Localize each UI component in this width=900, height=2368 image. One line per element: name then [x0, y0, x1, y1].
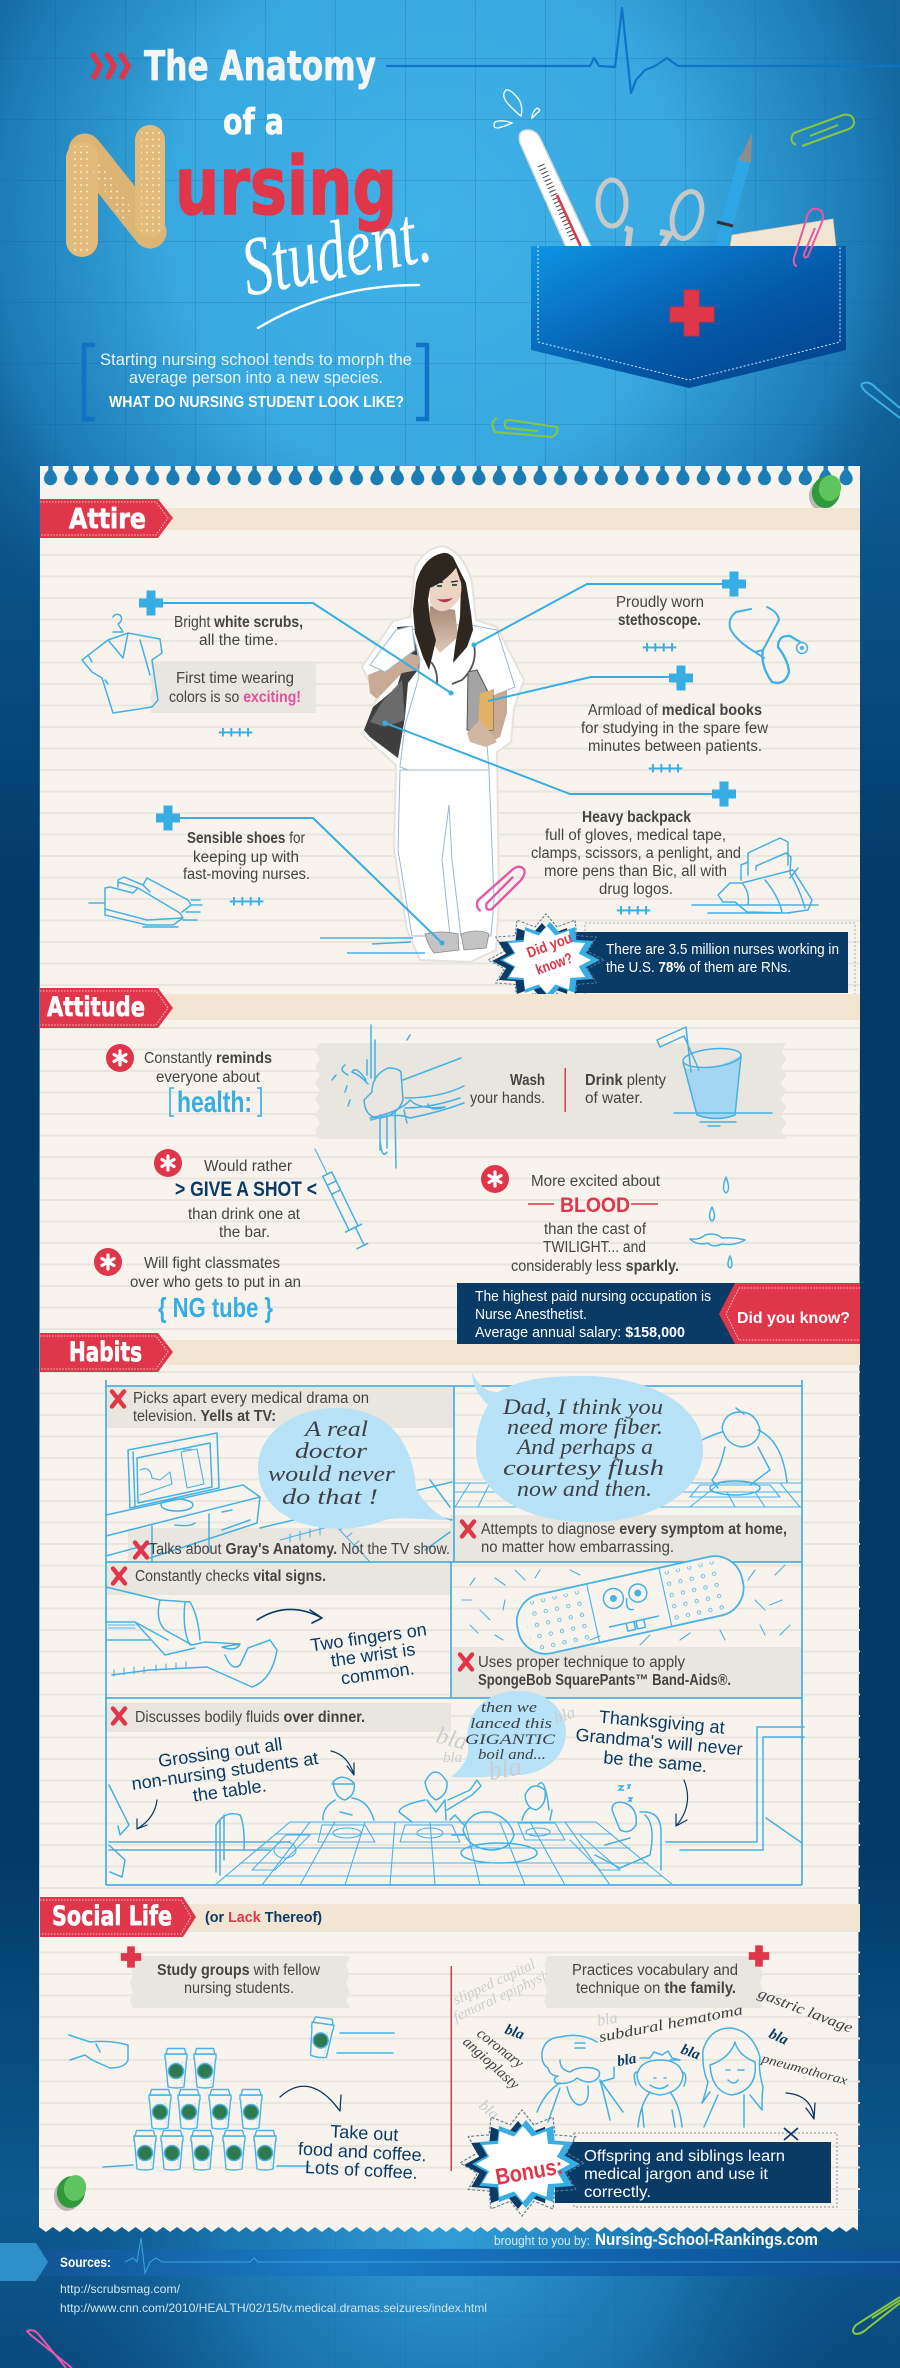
bla words: bla: [503, 2022, 527, 2043]
social: study groups: [121, 1946, 350, 2008]
caption: take out: Take out: [330, 2121, 399, 2145]
icon: television: [128, 1433, 219, 1508]
attitude: health reminder: [106, 1044, 272, 1119]
nurse figure: [320, 546, 524, 962]
arrow: scrubs: [162, 603, 451, 693]
attitude: give a shot: than drink one at: [188, 1206, 301, 1223]
speech bubble: dad: Dad, I think you: [502, 1394, 663, 1419]
callout: white scrubs: ++++: [218, 723, 254, 742]
word BLOOD: BLOOD: [560, 1194, 630, 1217]
title line: of a: of a: [223, 102, 284, 143]
shoes: [425, 931, 489, 953]
caption: dinner: Discusses bodily fluids over dinner.: [135, 1709, 365, 1726]
callout: white scrubs: all the time.: [199, 632, 278, 649]
icon: coffee cup held: [307, 2017, 335, 2059]
callout: medical books: Armload of medical books: [588, 702, 762, 719]
arrow: family: [786, 2093, 815, 2119]
source links: http://www.cnn.com/2010/HEALTH/02/15/tv.medical.dramas.seizures/index.html: [60, 2301, 487, 2315]
fact text: Offspring and siblings learn: [584, 2148, 785, 2165]
panel: TV sketch: [106, 1433, 452, 1562]
icon: green paperclip top right: [791, 115, 854, 146]
red plus: [749, 1945, 769, 1967]
caption: two fingers: Two fingers on: [309, 1619, 428, 1655]
term: coronary angioplasty: angioplasty: [459, 2034, 522, 2093]
speech bubble: real doctor: doctor: [295, 1438, 368, 1463]
icon: scrub shirt: [82, 614, 162, 713]
callout: bonus: [460, 2110, 837, 2216]
callout: stethoscope: stethoscope.: [618, 612, 701, 629]
speech bubble: gigantic boil: [433, 1691, 578, 1786]
social: family vocabulary: technique on the family.: [576, 1980, 736, 1997]
speech bubble: gigantic boil: then we: [481, 1700, 537, 1716]
callout: stethoscope: [616, 594, 808, 683]
section: Habits: Habits: [69, 1337, 142, 1368]
caption: two fingers: common.: [340, 1658, 416, 1688]
grey bla words: bla: [443, 1750, 462, 1766]
stethoscope: [431, 645, 475, 685]
social: family vocabulary: [451, 1945, 769, 2026]
icon: droplets: [690, 1177, 745, 1268]
icon: pen: [715, 133, 752, 247]
section: Attitude: [40, 988, 860, 1028]
callout: medical books: [581, 702, 769, 778]
caption: diagnose: [462, 1521, 787, 1556]
turkey: [450, 1812, 514, 1850]
attitude: wash and drink: Wash: [510, 1072, 545, 1089]
hands: [467, 720, 497, 747]
caption: take out: [297, 2120, 428, 2183]
caption: grossing out: the table.: [192, 1775, 268, 1806]
bla words: bla: [616, 2051, 638, 2070]
floor sketch: [260, 1480, 452, 1550]
title line: Student: Student.: [234, 187, 438, 315]
grandma asleep: [595, 1802, 661, 1870]
callout: heavy backpack: full of gloves, medical tape,: [545, 827, 726, 844]
student 3: [522, 1783, 552, 1820]
left arm: [368, 653, 420, 699]
speech bubble: dad: [472, 1373, 703, 1522]
scissors: [784, 2128, 798, 2140]
attitude: give a shot: the bar.: [219, 1224, 270, 1241]
sticker outline: [362, 546, 524, 962]
jargon words: [459, 1986, 855, 2123]
speech bubble: gigantic boil: GIGANTIC: [465, 1732, 556, 1748]
speech bubble: real doctor: A real: [303, 1416, 368, 1441]
callout: heavy backpack: drug logos.: [599, 881, 673, 898]
caption: picks apart: [112, 1390, 369, 1425]
scrubs top: [400, 625, 515, 777]
icon: backpack with books: [692, 838, 818, 913]
caption: thanksgiving: Grandma's will never: [575, 1725, 743, 1759]
caption: diagnose: no matter how embarrassing.: [481, 1539, 674, 1556]
starburst: [460, 2110, 584, 2216]
guest leaving: [109, 1785, 129, 1877]
ECG line at top: [386, 8, 900, 93]
term: pneumothorax: pneumothorax: [759, 2050, 849, 2088]
attitude: blood: than the cast of: [544, 1221, 647, 1238]
cabinet: [106, 1485, 260, 1562]
student 1: [323, 1777, 374, 1820]
callout: did you know (salary): The highest paid nursing occupation is: [475, 1288, 711, 1305]
intro text: Starting nursing school tends to morph the: [100, 351, 412, 369]
callout: did you know (salary): Average annual salary: $158,000: [475, 1324, 685, 1341]
arrow: books: [488, 677, 670, 701]
callout: sensible shoes: ++++: [229, 892, 265, 911]
panel: pulse check sketch: [106, 1587, 277, 1687]
red tab: [719, 1283, 860, 1344]
callout: white scrubs: colors is so exciting!: [169, 689, 301, 706]
tape: [130, 1956, 350, 2008]
callout: heavy backpack: Heavy backpack: [582, 809, 691, 826]
callout: heavy backpack: clamps, scissors, a penlight, and: [531, 845, 741, 862]
divider: [564, 1068, 566, 1112]
caption: take out: food and coffee.: [297, 2139, 427, 2165]
section: Social Life: Social Life: [52, 1901, 172, 1932]
sleep marks: [618, 1785, 632, 1801]
bla words: bla: [596, 2010, 619, 2030]
fact text: There are 3.5 million nurses working in: [606, 941, 839, 958]
callout: did you know (salary): Did you know?: [737, 1310, 850, 1327]
credit line: [494, 2230, 818, 2249]
attitude: NG tube: [94, 1248, 301, 1323]
table grid: [215, 1822, 673, 1885]
icon: green paperclip bottom: [492, 418, 557, 437]
caption: two fingers: the wrist is: [329, 1639, 416, 1671]
red tab: [40, 499, 173, 538]
attitude: blood: TWILIGHT... and: [543, 1239, 646, 1256]
room lines: [109, 1727, 804, 1850]
section: Attitude: Attitude: [47, 992, 145, 1023]
icon: clamps: [598, 180, 707, 247]
panel: sick kid sketch: [455, 1408, 802, 1507]
arrow: shoes: [179, 818, 442, 943]
red plus: [121, 1946, 141, 1968]
question: WHAT DO NURSING STUDENT LOOK LIKE?: [109, 394, 404, 411]
caption: picks apart: television. Yells at TV:: [133, 1408, 276, 1425]
bla words: [475, 2010, 791, 2123]
icon: thermometer with droplets: [494, 90, 591, 247]
attitude: blood: [481, 1165, 745, 1275]
attitude: blood: considerably less sparkly.: [511, 1258, 679, 1275]
navy box: [457, 1283, 737, 1344]
callout: sensible shoes: [89, 830, 310, 927]
callout: stethoscope: ++++: [642, 638, 678, 657]
icon: red chevrons: [92, 53, 128, 79]
icon: grandfather: [537, 2035, 623, 2122]
callout: heavy backpack: ++++: [616, 901, 652, 920]
caption: band-aids: Uses proper technique to apply: [478, 1654, 685, 1671]
icon: pink paperclip footer: [27, 2330, 72, 2368]
books: [467, 670, 493, 732]
icon: girl: [702, 2028, 763, 2127]
bla words: bla: [766, 2026, 791, 2049]
navy box: [574, 932, 848, 993]
pocket red cross: [670, 290, 714, 336]
motion lines: [320, 938, 425, 953]
attitude: NG tube: over who gets to put in an: [130, 1274, 301, 1291]
icon: graph paper: [730, 219, 836, 247]
bla words: bla: [475, 2097, 502, 2123]
caption: grossing out: non-nursing students at: [130, 1748, 319, 1794]
icon: shoes: [89, 877, 202, 927]
speech bubble: real doctor: would never: [268, 1461, 395, 1486]
dotted frame: [574, 2133, 837, 2207]
grey bla words: bla: [433, 1723, 470, 1756]
navy box: [555, 2142, 831, 2203]
grey note box: [150, 662, 316, 713]
callout: did you know (salary): Nurse Anesthetist.: [475, 1306, 587, 1323]
ECG line: [125, 2238, 900, 2273]
eyes and mouth: [436, 581, 458, 583]
label: Did you: [525, 930, 575, 962]
label: Sources:: [60, 2254, 111, 2270]
callout: heavy backpack: [531, 809, 818, 920]
callout lines: [139, 572, 746, 946]
label: Bonus:: [493, 2153, 565, 2190]
arrow tab: [0, 2243, 48, 2281]
underline swoosh: [258, 285, 419, 328]
divider: [450, 1966, 452, 2171]
icon: coffee cup pyramid: [103, 2048, 310, 2170]
callout: bonus: medical jargon and use it: [584, 2166, 769, 2183]
place settings: [252, 1823, 620, 1870]
caption: two fingers: [309, 1619, 433, 1692]
caption: band-aids: SpongeBob SquarePants™ Band-Aids®.: [478, 1672, 731, 1689]
attitude: wash and drink: [470, 1068, 666, 1112]
caption: diagnose: Attempts to diagnose every symptom at home,: [481, 1521, 787, 1538]
attitude: health reminder: everyone about: [156, 1069, 261, 1086]
caption: greys anatomy: Talks about Gray's Anatomy. Not the TV show.: [149, 1541, 450, 1558]
pocket body: [531, 246, 846, 388]
section: Social Life: [40, 1897, 860, 1937]
arrow: coffee: [280, 2086, 341, 2111]
callout: medical books: minutes between patients.: [588, 738, 762, 755]
backpack: [364, 626, 420, 758]
callout: did you know (nurses): [488, 914, 855, 1006]
icon: pink paperclip on page: [469, 865, 533, 913]
grey jargon: femoral epiphysis: [451, 1966, 554, 2026]
heading: Attire: [69, 502, 146, 535]
icon: pink paperclip: [794, 209, 823, 266]
attitude: wash and drink: your hands.: [470, 1090, 545, 1107]
callout: bonus: correctly.: [584, 2184, 651, 2201]
child: [702, 1408, 787, 1488]
icon: SpongeBob bandage: [511, 1551, 749, 1659]
icon: syringe: [307, 1145, 370, 1250]
arrow: stethoscope: [474, 584, 722, 645]
panel: thanksgiving sketch: [109, 1727, 804, 1885]
pocket stitches: [538, 246, 840, 380]
icon: blue paperclip right: [861, 383, 900, 418]
speech bubble: gigantic boil: lanced this: [470, 1716, 552, 1732]
arrow: backpack: [385, 723, 713, 794]
callout: medical books: for studying in the spare few: [581, 720, 769, 737]
right forearm: [467, 690, 507, 744]
caption: grossing out: [128, 1729, 322, 1814]
arrows: dinner: [137, 1751, 688, 1829]
grey bla words: bla: [486, 1752, 524, 1786]
speech bubble: dad: And perhaps a: [515, 1434, 653, 1459]
face: [430, 568, 461, 611]
callout: sensible shoes: keeping up with: [193, 849, 299, 866]
icon: washing hands: [332, 1025, 464, 1168]
speech bubble: dad: need more fiber.: [507, 1414, 663, 1439]
credit line: brought to you by:: [494, 2233, 590, 2248]
text: Bright white scrubs,: [174, 614, 303, 631]
speech bubble: dad: courtesy flush: [503, 1455, 664, 1480]
social: study groups: nursing students.: [184, 1980, 294, 1997]
band: [165, 508, 860, 530]
callout: did you know (nurses): the U.S. 78% of them are RNs.: [606, 959, 791, 976]
bandage letter N: [72, 128, 160, 252]
plate: [710, 1481, 760, 1495]
attitude: wash and drink: of water.: [585, 1090, 643, 1107]
icon: reaching hands: [69, 2033, 394, 2068]
caption: picks apart: Picks apart every medical drama on: [133, 1390, 369, 1407]
starburst: [488, 914, 604, 1006]
caption: grossing out: Grossing out all: [157, 1734, 284, 1771]
callout: did you know (salary): [457, 1283, 860, 1344]
speech bubble: real doctor: [258, 1408, 450, 1529]
icon: green pushpin bottom: [50, 2173, 88, 2214]
comic panel frames: [106, 1380, 802, 1885]
title line: The Anatomy: The Anatomy: [144, 42, 376, 90]
comic captions: [112, 1390, 787, 1726]
attitude: give a shot: [154, 1149, 317, 1241]
caption: band-aids: [460, 1654, 731, 1689]
callout: medical books: ++++: [648, 759, 684, 778]
attitude: wash and drink: Drink plenty: [585, 1072, 666, 1089]
icon: stethoscope: [730, 607, 808, 683]
source links: http://scrubsmag.com/: [60, 2282, 181, 2296]
caption: thanksgiving: [573, 1705, 745, 1779]
left sleeve: [370, 626, 415, 672]
grey jargon: slipped capital: [451, 1957, 538, 2009]
source links: [60, 2282, 487, 2315]
comic grey caption boxes: [106, 1387, 802, 1732]
caption: vital signs: Constantly checks vital signs.: [135, 1568, 326, 1585]
icon: green paperclip footer: [853, 2297, 900, 2334]
sources band: [0, 2238, 900, 2281]
term: gastric lavage: gastric lavage: [756, 1986, 855, 2037]
dotted frame: [585, 923, 855, 997]
chair: [216, 1814, 244, 1875]
arrow: pulse: [257, 1609, 322, 1623]
intro text block: [84, 345, 427, 419]
scrub pants: [398, 770, 494, 936]
bracket word: health: health:: [177, 1086, 252, 1119]
braces word: { NG tube }: [158, 1292, 273, 1323]
callout: heavy backpack: more pens than Bic, all with: [544, 863, 727, 880]
caption: take out: Lots of coffee.: [305, 2157, 418, 2183]
neck: [428, 606, 458, 653]
title: [72, 42, 438, 328]
panel: paper sheet: [39, 466, 860, 2232]
callout: sensible shoes: fast-moving nurses.: [183, 866, 310, 883]
icon: green pushpin top: [805, 473, 843, 514]
callout: sensible shoes: Sensible shoes for: [187, 830, 305, 847]
tape: [544, 1956, 763, 2008]
speech bubble: gigantic boil: boil and...: [478, 1747, 546, 1763]
sub heading: (or Lack Thereof): [205, 1909, 322, 1926]
icon: boy: [634, 2051, 686, 2127]
section: Attire: [40, 499, 860, 538]
social: study groups: Study groups with fellow: [157, 1962, 321, 1979]
attitude: health reminder: Constantly reminds: [144, 1050, 272, 1067]
attitude: NG tube: Will fight classmates: [144, 1255, 280, 1272]
speech bubble: real doctor: do that !: [282, 1484, 378, 1509]
section: Habits: [40, 1333, 860, 1372]
speech bubble: dad: now and then.: [517, 1476, 652, 1501]
social: family vocabulary: Practices vocabulary and: [572, 1962, 738, 1979]
chevrons and word: > GIVE A SHOT <: [175, 1178, 317, 1201]
pocket illustration: [494, 90, 846, 388]
grey bla words: bla: [551, 1702, 578, 1728]
note text: First time wearing: [176, 670, 294, 687]
term: subdural hematoma: subdural hematoma: [598, 2002, 744, 2046]
caption: thanksgiving: be the same.: [603, 1747, 708, 1776]
credit line: Nursing-School-Rankings.com: [595, 2230, 818, 2249]
bla words: bla: [679, 2042, 703, 2063]
grey bla words: [433, 1702, 578, 1786]
attitude: give a shot: Would rather: [204, 1158, 292, 1175]
title line: ursing: ursing: [175, 140, 397, 233]
attitude: blood: More excited about: [531, 1173, 661, 1190]
callout: white scrubs: [82, 614, 316, 742]
bandage motion marks: [462, 1565, 790, 1645]
student 2: [399, 1772, 481, 1822]
term: coronary angioplasty: coronary: [474, 2026, 527, 2072]
icon: glass of water: [657, 1027, 772, 1126]
intro line 2: average person into a new species.: [129, 369, 383, 387]
grey tape band: [315, 1043, 786, 1139]
hair back and sides: [413, 553, 473, 670]
callout: did you know (nurses): know?: [534, 950, 575, 979]
caption: thanksgiving: Thanksgiving at: [598, 1707, 725, 1738]
brackets: [84, 345, 427, 419]
callout: stethoscope: Proudly worn: [616, 594, 704, 611]
